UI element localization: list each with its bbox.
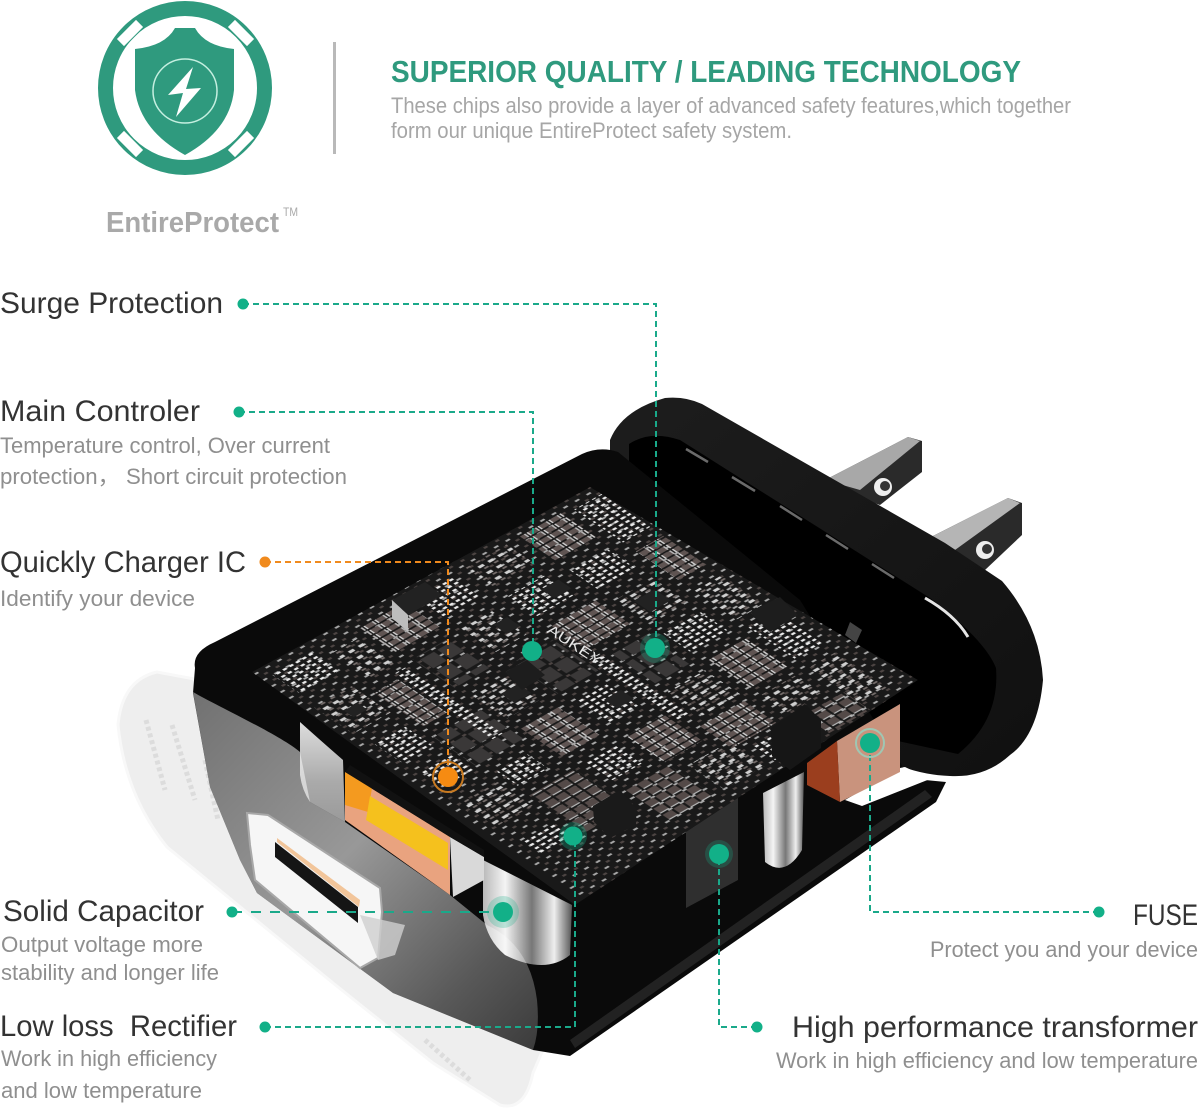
transformer — [686, 798, 738, 908]
callout: Main Controler: protection， Short circuit protection — [0, 464, 347, 489]
callout: Quickly Charger IC: Quickly Charger IC — [0, 546, 246, 579]
callout: Solid Capacitor — [1, 895, 519, 985]
callout: Surge Protection — [0, 287, 670, 663]
callout: FUSE — [856, 729, 1198, 962]
callout: Main Controler: Main Controler — [0, 395, 200, 428]
callout: Solid Capacitor: Output voltage more — [1, 932, 203, 957]
callout: Quickly Charger IC: Identify your device — [0, 586, 195, 611]
white gap above lower shell — [845, 767, 930, 806]
callout: Low loss Rectifier: Work in high efficiency — [1, 1046, 217, 1071]
callout: High performance transformer — [705, 840, 1198, 1073]
header divider — [333, 42, 336, 154]
rear plug plate — [610, 398, 1043, 776]
logo wordmark: EntireProtect — [106, 207, 279, 239]
translucent front cover — [193, 692, 538, 1050]
board brand text: AUKEY — [544, 621, 606, 669]
faceplate — [118, 672, 545, 1106]
callout: Solid Capacitor: stability and longer life — [1, 960, 219, 985]
intro text: These chips also provide a layer of advanced safety features,which together — [391, 93, 1071, 118]
logo wordmark: TM — [283, 205, 298, 219]
USB port — [345, 765, 484, 897]
capacitors — [300, 722, 804, 965]
callout: Main Controler — [0, 395, 542, 661]
callout: Main Controler: Temperature control, Over current — [0, 433, 330, 458]
icon: EntireProtect shield logo — [106, 8, 264, 168]
callout: Solid Capacitor: Solid Capacitor — [3, 895, 204, 928]
callout: Surge Protection: Surge Protection — [0, 287, 223, 320]
circuit board — [252, 487, 918, 904]
black body shell — [193, 449, 946, 1056]
callout: Low loss Rectifier — [0, 822, 587, 1103]
callout: High performance transformer: High performance transformer — [792, 1011, 1198, 1044]
callout: High performance transformer: Work in high efficiency and low temperature — [776, 1048, 1198, 1073]
prongs — [825, 437, 1022, 570]
callout: Low loss Rectifier: and low temperature — [1, 1078, 202, 1103]
board chips — [392, 582, 821, 838]
intro text — [391, 93, 1071, 143]
callout: Quickly Charger IC — [0, 546, 463, 792]
intro text: form our unique EntireProtect safety system. — [391, 118, 792, 143]
callout: Low loss Rectifier: Low loss Rectifier — [0, 1010, 237, 1043]
charger illustration — [118, 398, 1043, 1106]
title: SUPERIOR QUALITY / LEADING TECHNOLOGY — [391, 54, 1021, 89]
callout: FUSE: Protect you and your device — [930, 937, 1198, 962]
fuse block — [807, 704, 900, 802]
front micro USB port — [247, 813, 405, 968]
